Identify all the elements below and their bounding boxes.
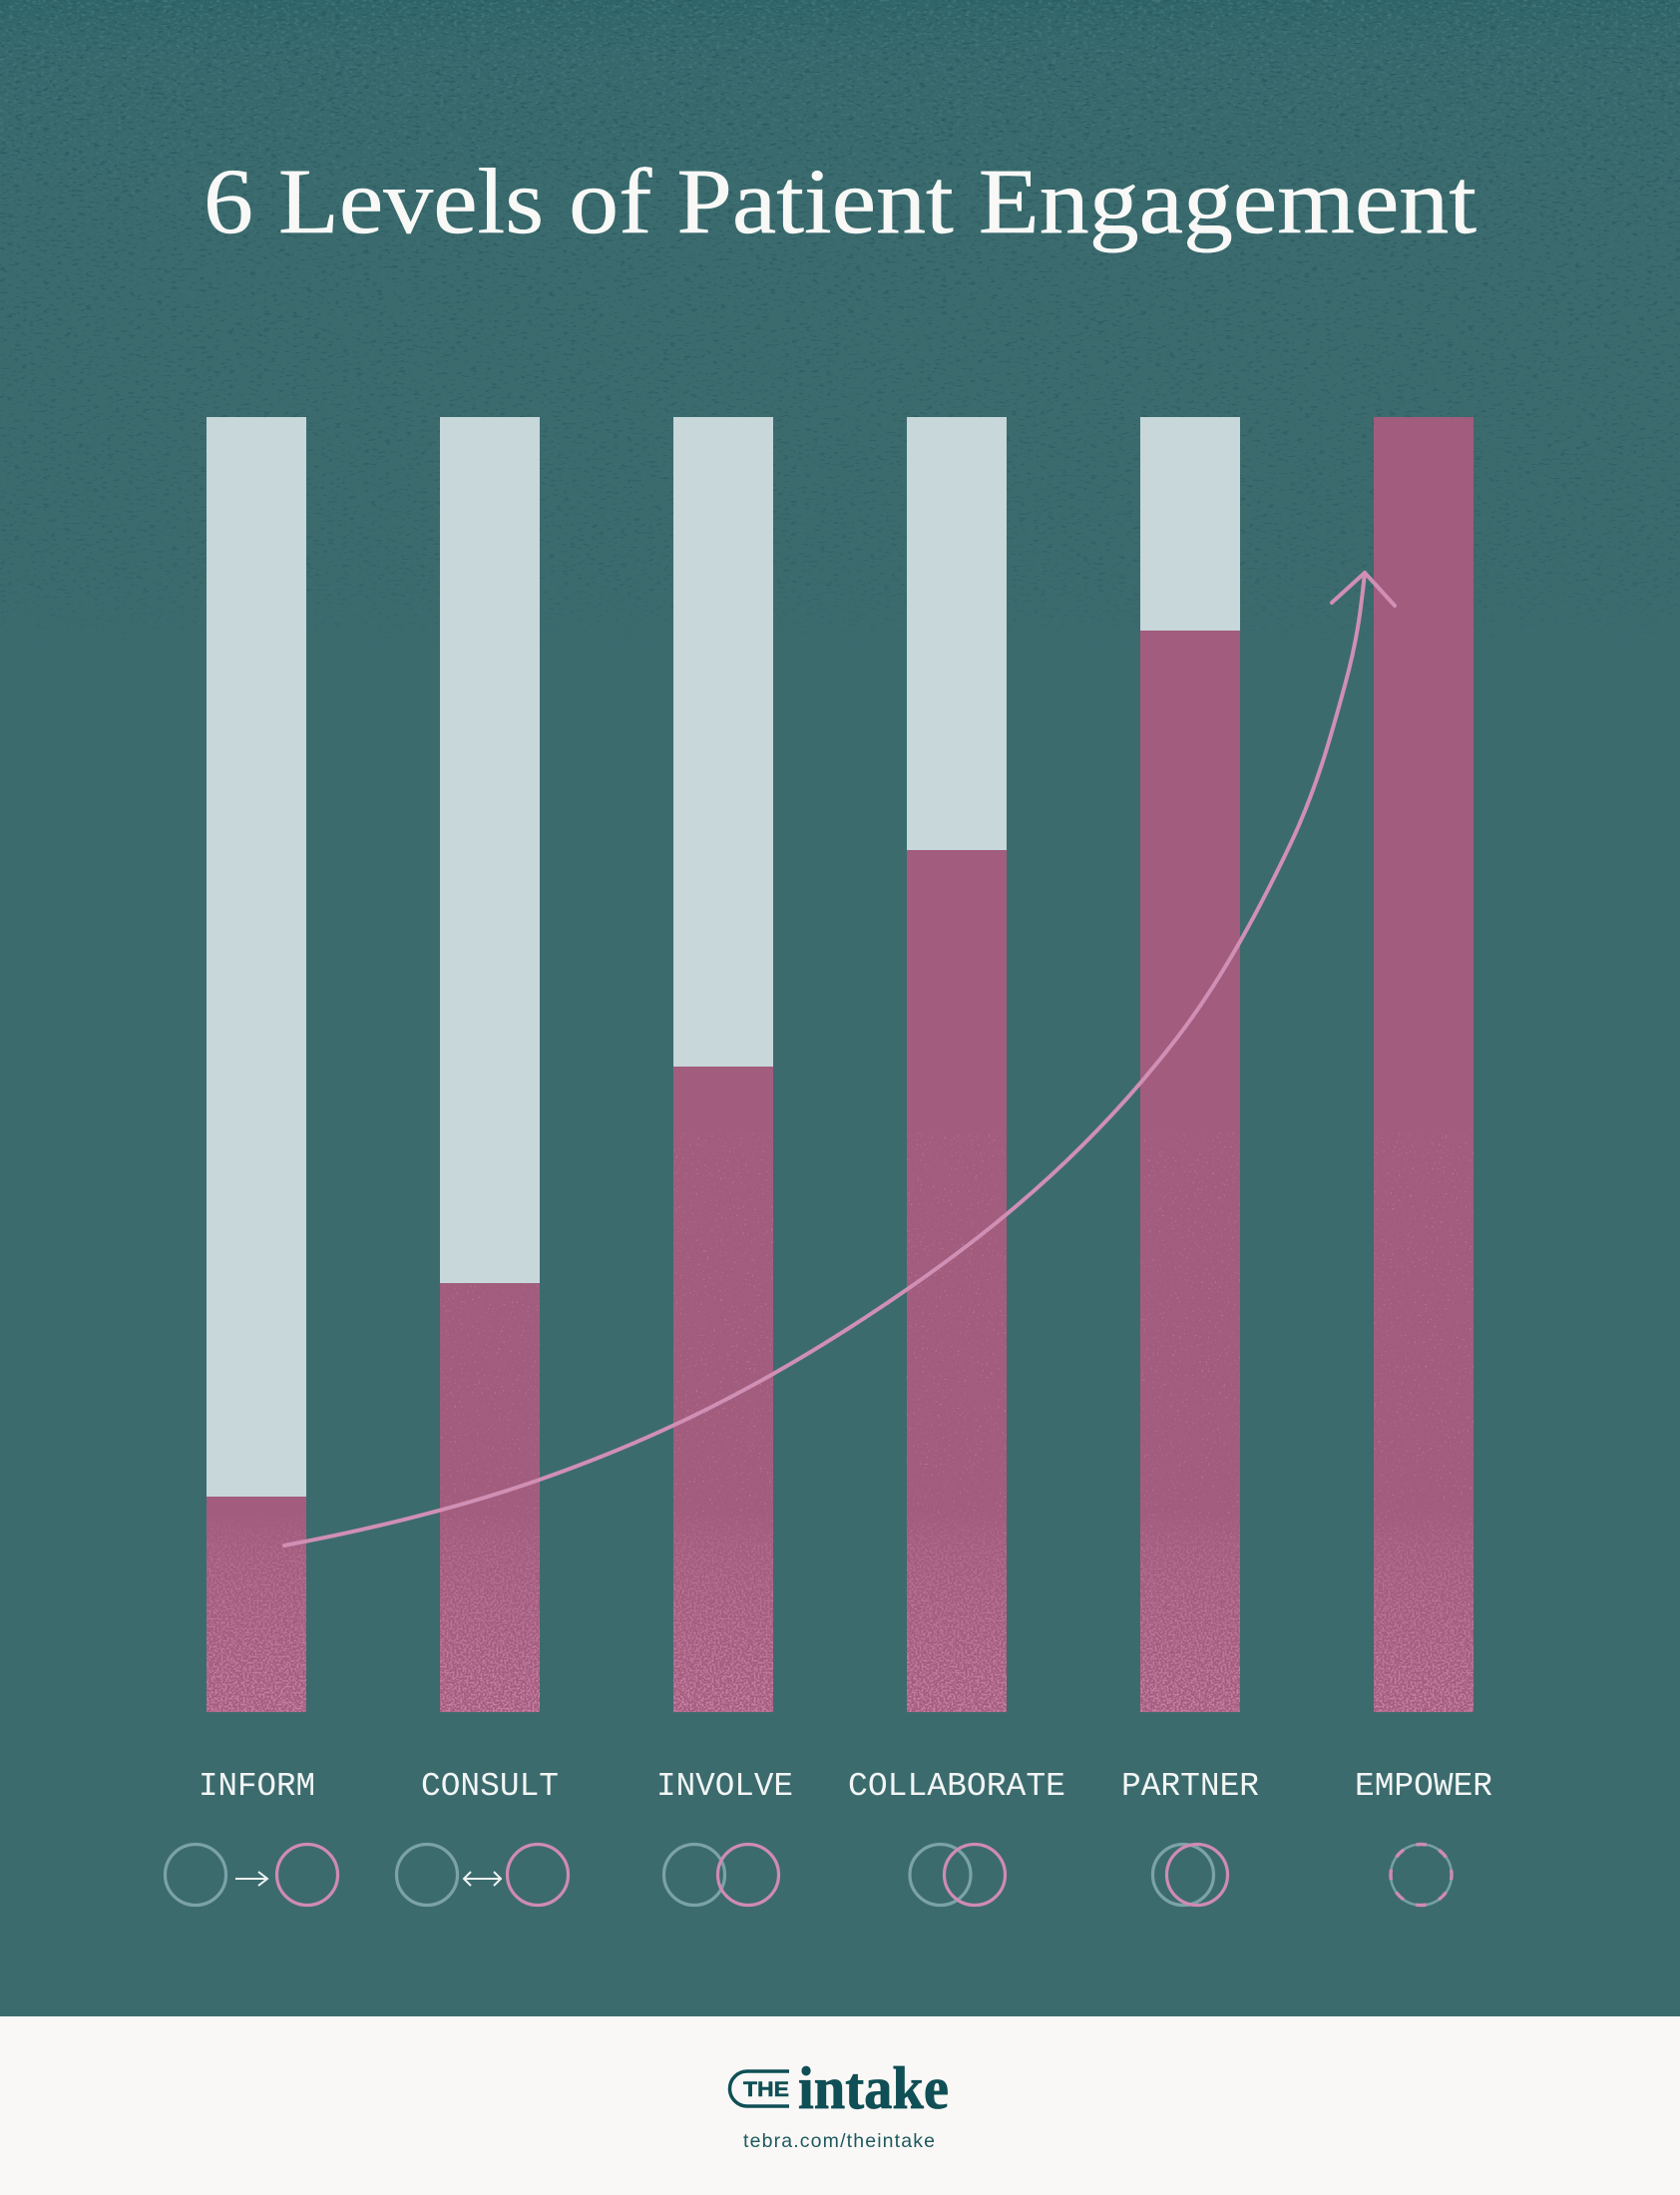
label: partner: PARTNER <box>1121 1768 1259 1805</box>
title: 6 Levels of Patient Engagement <box>204 151 1476 253</box>
panel: teal background <box>0 0 1680 595</box>
bar grain <box>207 1532 1473 1712</box>
label: empower: EMPOWER <box>1355 1768 1492 1805</box>
chart: stacked bars <box>207 417 1473 1712</box>
bar: inform <box>207 417 306 1712</box>
logo: the intake <box>730 2055 949 2121</box>
icon: consult circles with two-way arrow <box>397 1844 569 1906</box>
sparse bar specks <box>440 1132 1473 1552</box>
level labels <box>199 1768 1492 1805</box>
icon: partner nearly merged circles <box>1153 1844 1227 1906</box>
footer url: tebra.com/theintake <box>743 2130 935 2152</box>
icon: collaborate overlapping circles <box>910 1844 1006 1906</box>
arrow: rising curve <box>284 573 1395 1545</box>
logo: the intake: intake <box>798 2055 949 2121</box>
bar: empower <box>1374 417 1473 1712</box>
icon: empower merged circle <box>1391 1844 1452 1906</box>
icon: inform circles with one-way arrow <box>166 1844 337 1906</box>
level icons <box>166 1844 1452 1906</box>
label: involve: INVOLVE <box>656 1768 793 1805</box>
label: collaborate: COLLABORATE <box>848 1768 1065 1805</box>
bar: consult <box>440 417 540 1712</box>
logo: the intake: THE <box>743 2078 789 2101</box>
bar: involve <box>673 417 773 1712</box>
label: inform: INFORM <box>199 1768 315 1805</box>
icon: involve overlapping circles <box>664 1844 778 1906</box>
label: consult: CONSULT <box>421 1768 559 1805</box>
panel: footer <box>0 2016 1680 2195</box>
bar: collaborate <box>907 417 1007 1712</box>
bar: partner <box>1140 417 1240 1712</box>
